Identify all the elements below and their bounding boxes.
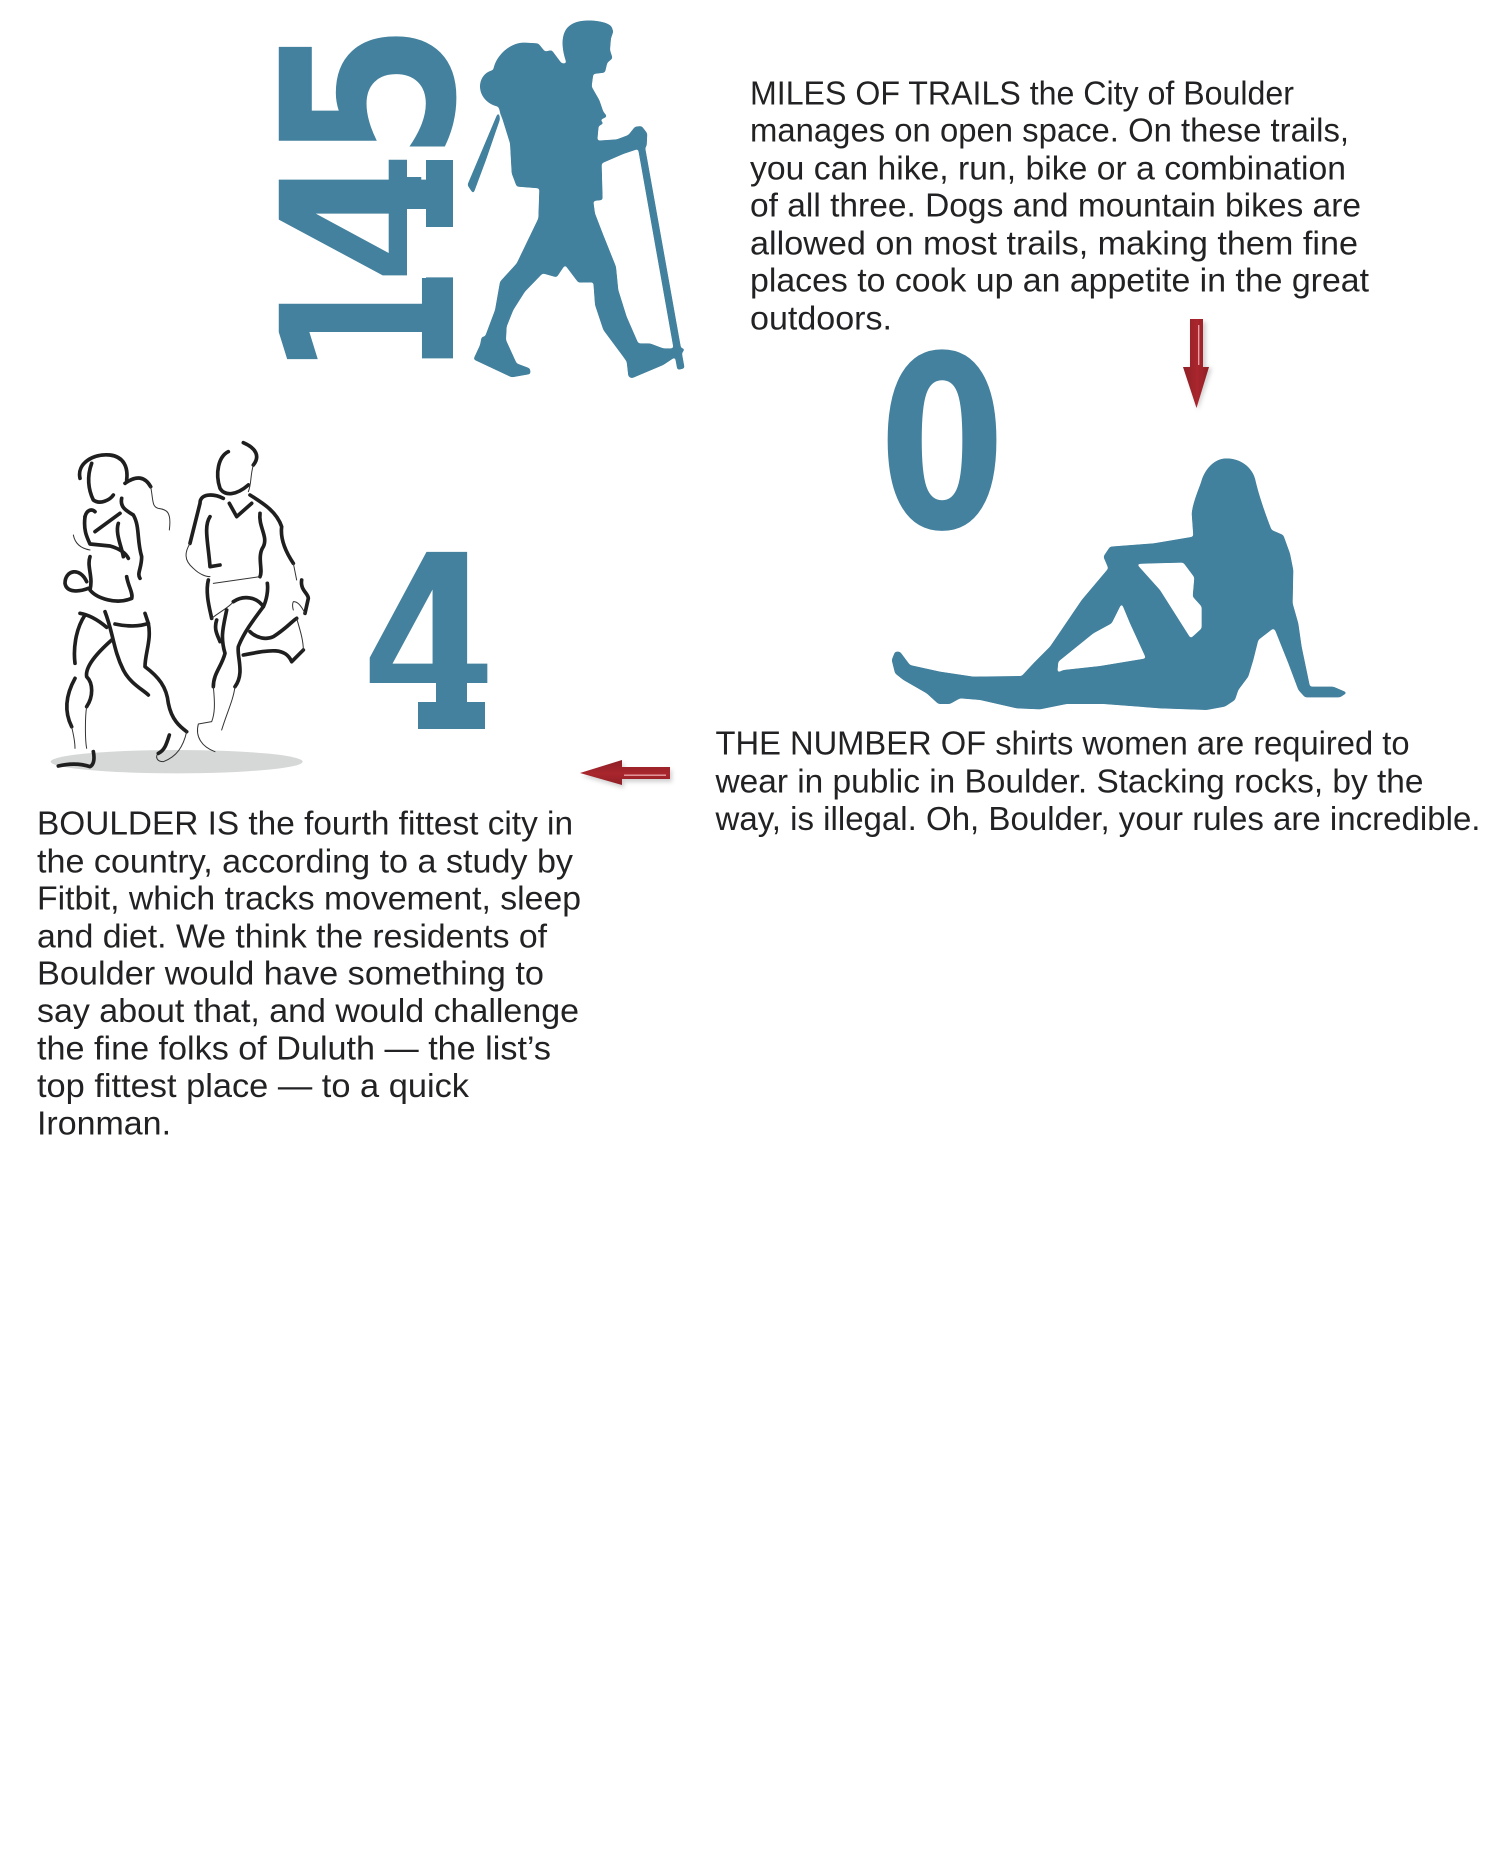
text block: fourth fittest city: say about that, and would challenge <box>37 993 579 1030</box>
text block: miles of trails: of all three. Dogs and mountain bikes are <box>750 188 1361 225</box>
text block: fourth fittest city: Boulder would have something to <box>37 956 544 993</box>
text block: fourth fittest city <box>37 805 581 1142</box>
icon: two runners line drawing <box>51 443 308 773</box>
text block: fourth fittest city: the country, according to a study by <box>37 843 573 880</box>
number: 145 rotated: 4 <box>232 151 510 284</box>
text block: number of shirts: way, is illegal. Oh, Boulder, your rules are incredible. <box>715 801 1480 838</box>
icon: seated woman silhouette <box>892 458 1347 710</box>
text block: fourth fittest city: Fitbit, which tracks movement, sleep <box>37 880 581 917</box>
number: 0: 0 <box>879 306 1005 585</box>
text block: number of shirts <box>715 725 1480 838</box>
text block: fourth fittest city: top fittest place — to a quick <box>37 1068 469 1105</box>
text block: fourth fittest city: the fine folks of Duluth — the list’s <box>37 1030 551 1067</box>
text block: miles of trails: places to cook up an appetite in the great <box>750 263 1370 300</box>
number: 145 rotated: 1 <box>232 266 510 377</box>
text block: fourth fittest city: Ironman. <box>37 1105 171 1142</box>
text block: miles of trails: allowed on most trails, making them fine <box>750 225 1358 262</box>
number: 4: 4 <box>361 504 496 786</box>
text block: number of shirts: THE NUMBER OF shirts women are required to <box>716 725 1410 762</box>
text block: miles of trails: you can hike, run, bike or a combination <box>750 150 1346 187</box>
text block: miles of trails: manages on open space. On these trails, <box>750 113 1349 150</box>
icon: hiker silhouette <box>467 20 685 378</box>
text block: fourth fittest city: BOULDER IS the fourth fittest city in <box>37 805 573 842</box>
ground shadow <box>51 750 303 773</box>
number: 145 rotated <box>232 22 510 377</box>
text block: miles of trails: outdoors. <box>750 300 892 337</box>
arrow: pointing left <box>580 760 672 788</box>
text block: miles of trails <box>750 75 1370 337</box>
number: 145 rotated: 5 <box>232 22 510 162</box>
text block: number of shirts: wear in public in Boulder. Stacking rocks, by the <box>715 763 1424 800</box>
text block: fourth fittest city: and diet. We think the residents of <box>37 918 548 955</box>
text block: miles of trails: MILES OF TRAILS the City of Boulder <box>750 75 1294 112</box>
arrow: pointing down <box>1183 319 1212 410</box>
